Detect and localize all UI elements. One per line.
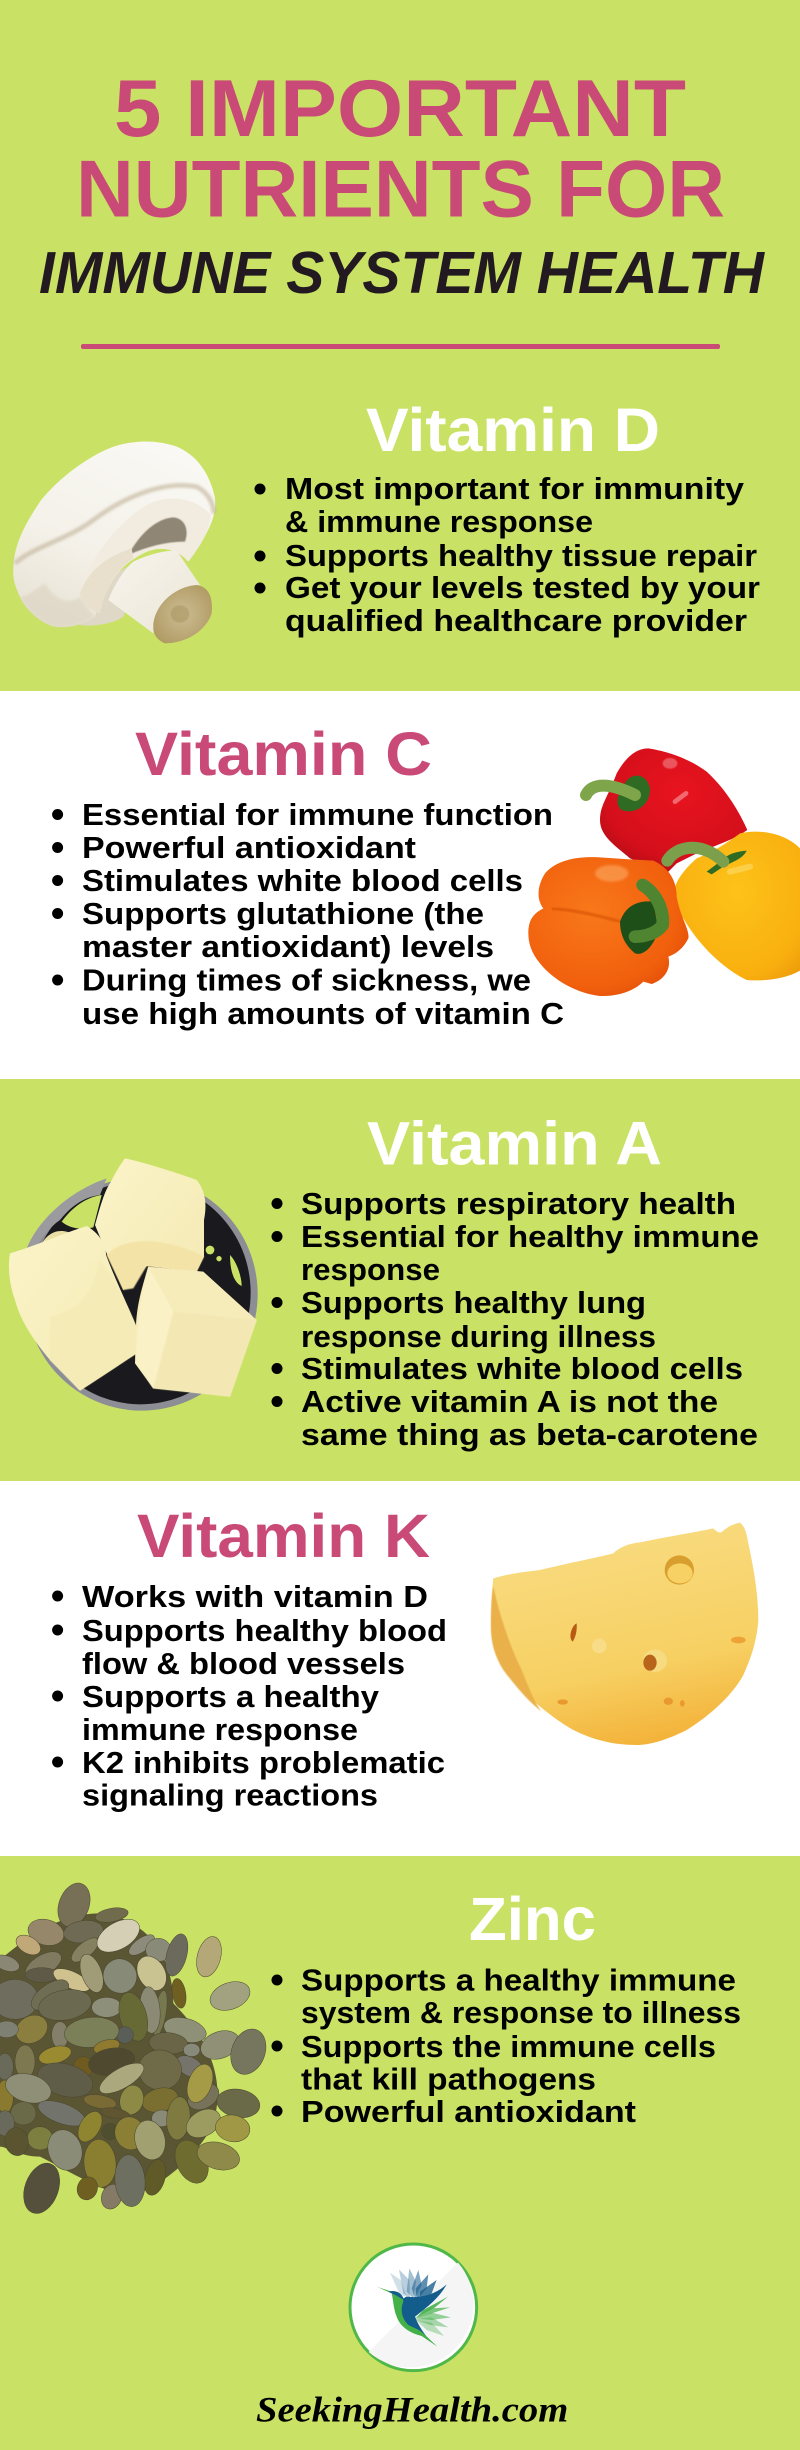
icon: mushroom (13, 441, 215, 643)
icon: cheese wedge (491, 1523, 758, 1745)
icon: pumpkin seeds (0, 1879, 272, 2218)
panel: Vitamin D (13, 396, 760, 643)
bullet list: Vitamin D: & immune response (285, 504, 593, 539)
bullet list: Vitamin A: Essential for healthy immune (301, 1219, 759, 1254)
bullet list: Zinc: Supports the immune cells (301, 2029, 716, 2064)
bullet list: Zinc (272, 1962, 741, 2129)
bullet list: Vitamin K: immune response (82, 1712, 358, 1747)
bullet list: Vitamin D: Get your levels tested by your (285, 570, 760, 605)
bullet list: Vitamin C: During times of sickness, we (82, 962, 531, 998)
title: 5 IMPORTANT (114, 64, 686, 154)
bullet list: Vitamin A: Stimulates white blood cells (301, 1351, 743, 1386)
bullet list: Vitamin K (52, 1579, 447, 1812)
bullet list: Vitamin D: Most important for immunity (285, 471, 745, 506)
title: IMMUNE SYSTEM HEALTH (39, 240, 765, 306)
bullet list: Vitamin A: Active vitamin A is not the (301, 1384, 718, 1419)
bullet list: Vitamin D (254, 471, 760, 638)
bullet list: Zinc: that kill pathogens (301, 2062, 596, 2096)
panel: Zinc (0, 1879, 741, 2218)
bullet list: Vitamin D: Supports healthy tissue repair (285, 538, 757, 573)
heading: Vitamin K: Vitamin K (137, 1502, 430, 1570)
bullet list: Vitamin K: K2 inhibits problematic (82, 1745, 445, 1780)
title (39, 64, 765, 306)
bullet list: Vitamin D: qualified healthcare provider (285, 603, 747, 638)
bullet list: Vitamin C: Stimulates white blood cells (82, 863, 523, 898)
heading: Zinc: Zinc (469, 1885, 596, 1953)
title divider (81, 344, 720, 349)
bullet list: Vitamin A: response (301, 1252, 440, 1287)
bullet list: Vitamin A (272, 1186, 759, 1452)
bullet list: Vitamin K: flow & blood vessels (82, 1646, 405, 1681)
bullet list: Vitamin A: same thing as beta-carotene (301, 1417, 758, 1452)
title: NUTRIENTS FOR (76, 144, 725, 234)
bullet list: Vitamin C: use high amounts of vitamin C (82, 996, 564, 1031)
panel: Vitamin K (0, 1481, 800, 1856)
heading: Vitamin A: Vitamin A (367, 1110, 662, 1178)
bullet list: Vitamin A: Supports respiratory health (301, 1186, 736, 1221)
icon: bell peppers (528, 748, 800, 996)
bullet list: Vitamin K: Supports healthy blood (82, 1613, 447, 1648)
panel: Vitamin C (0, 691, 800, 1079)
heading: Vitamin C: Vitamin C (135, 720, 432, 788)
bullet list: Vitamin K: signaling reactions (82, 1778, 378, 1812)
bullet list: Vitamin A: response during illness (301, 1319, 656, 1354)
bullet list: Vitamin A: Supports healthy lung (301, 1285, 646, 1320)
bullet list: Vitamin K: Supports a healthy (82, 1679, 380, 1714)
bullet list: Vitamin C: Powerful antioxidant (82, 830, 416, 865)
icon: butter in bowl (9, 1158, 258, 1411)
bullet list: Vitamin K: Works with vitamin D (82, 1579, 428, 1614)
heading: Vitamin D: Vitamin D (366, 396, 660, 464)
logo: hummingbird badge (256, 2244, 568, 2430)
bullet list: Vitamin C (52, 797, 564, 1031)
bullet list: Vitamin C: master antioxidant) levels (82, 929, 494, 964)
bullet list: Zinc: Powerful antioxidant (301, 2094, 636, 2129)
logo wordmark: SeekingHealth.com (256, 2390, 568, 2430)
bullet list: Vitamin C: Supports glutathione (the (82, 896, 484, 931)
bullet list: Zinc: Supports a healthy immune (301, 1962, 736, 1998)
bullet list: Zinc: system & response to illness (301, 1995, 741, 2030)
panel: Vitamin A (9, 1110, 759, 1452)
bullet list: Vitamin C: Essential for immune function (82, 797, 553, 832)
